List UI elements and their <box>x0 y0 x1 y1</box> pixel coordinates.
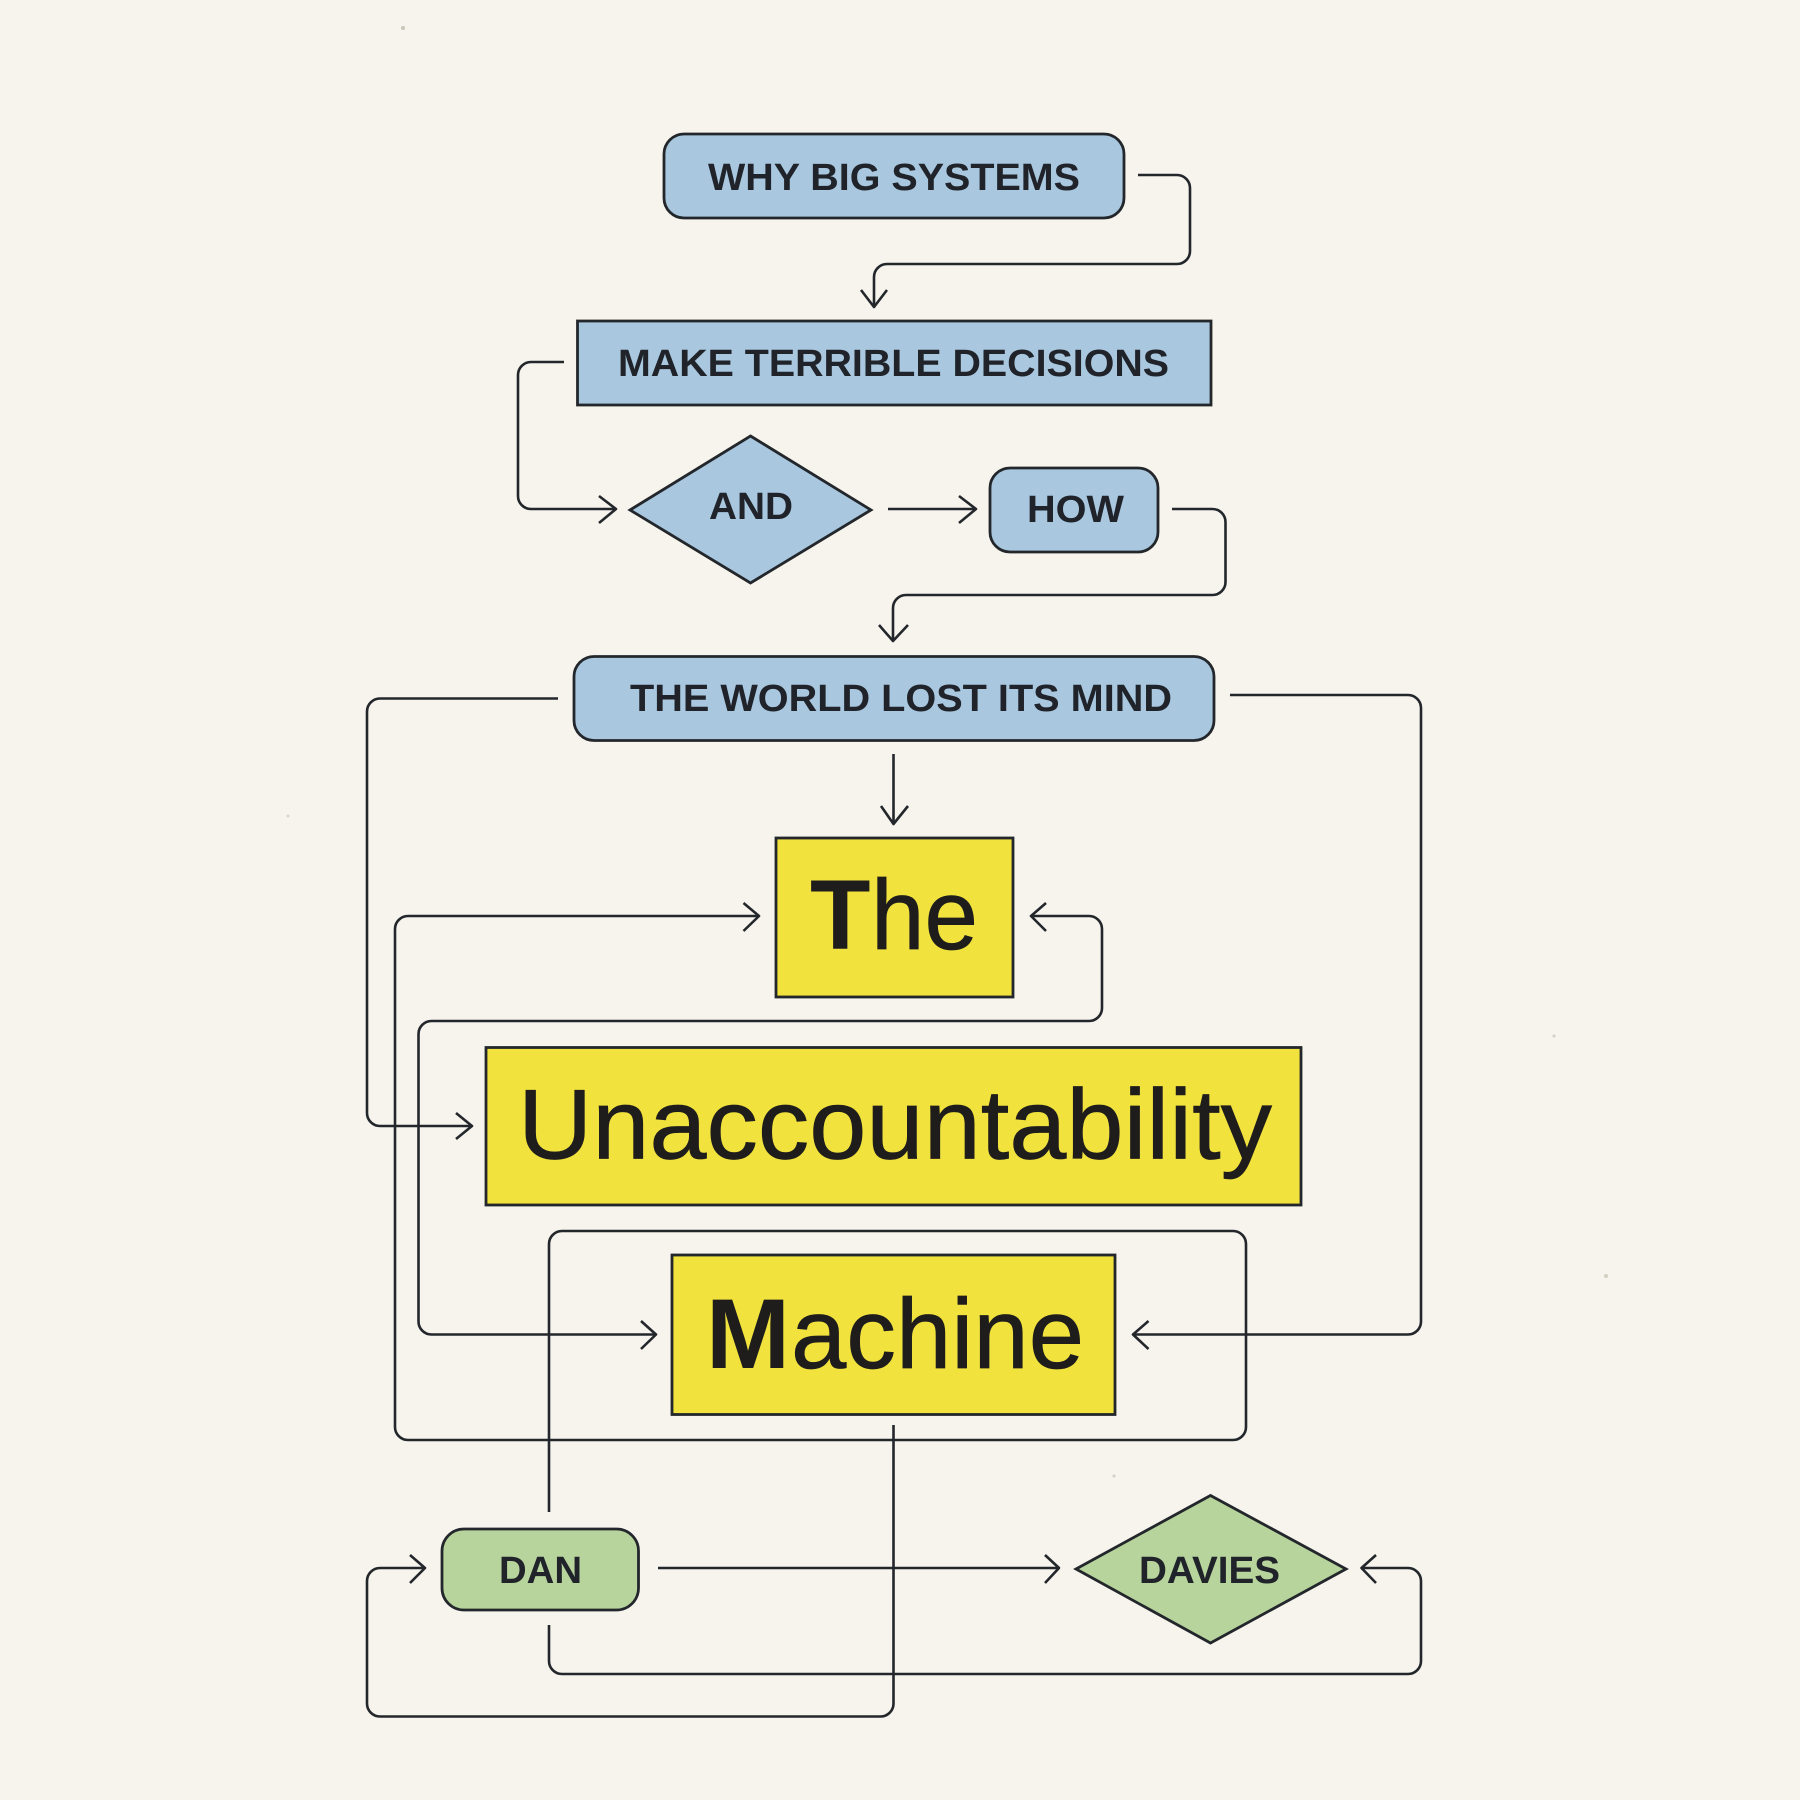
arrow: and to how <box>888 496 976 523</box>
arrow: machine left to the right <box>418 903 1102 1349</box>
arrow: dan underneath to davies <box>549 1555 1421 1674</box>
panel: title word machine: M <box>706 1278 790 1389</box>
panel: make terrible decisions <box>578 321 1211 405</box>
arrow: world left side to unaccountability <box>367 698 558 1139</box>
panel: title word unaccountability: Unaccountability <box>518 1068 1273 1180</box>
panel: how <box>990 468 1158 552</box>
panel: dan <box>442 1529 638 1610</box>
arrow: dan to davies <box>658 1555 1059 1583</box>
panel: the world lost its mind <box>574 656 1214 740</box>
panel: dan: DAN <box>499 1550 582 1592</box>
arrow: how to the world lost its mind <box>879 509 1226 641</box>
panel: why big systems: WHY BIG SYSTEMS <box>708 157 1080 199</box>
panel: title word unaccountability <box>486 1048 1301 1205</box>
panel: title word machine: achine <box>791 1278 1084 1389</box>
panel: davies diamond: DAVIES <box>1139 1550 1280 1592</box>
panel: title word machine <box>672 1255 1115 1414</box>
panel: the world lost its mind: THE WORLD LOST ITS MIND <box>630 678 1172 720</box>
panel: how: HOW <box>1027 489 1124 531</box>
panel: why big systems <box>664 134 1124 218</box>
arrow: world right side to machine <box>1133 695 1421 1349</box>
arrow: why big systems to make terrible decisions <box>861 175 1190 307</box>
panel: title word the: he <box>871 859 978 970</box>
arrow: make terrible decisions to and <box>518 362 616 523</box>
arrow: machine down to dan <box>367 1425 894 1716</box>
panel: and diamond <box>630 436 871 583</box>
panel: davies diamond <box>1076 1496 1346 1643</box>
panel: title word the: T <box>810 859 870 970</box>
panel: and diamond: AND <box>709 486 793 528</box>
panel: make terrible decisions: MAKE TERRIBLE DECISIONS <box>618 343 1169 385</box>
arrow: world down to the <box>881 754 908 824</box>
arrow: loop from dan around machine to the <box>395 903 1246 1512</box>
panel: title word the <box>776 838 1013 997</box>
